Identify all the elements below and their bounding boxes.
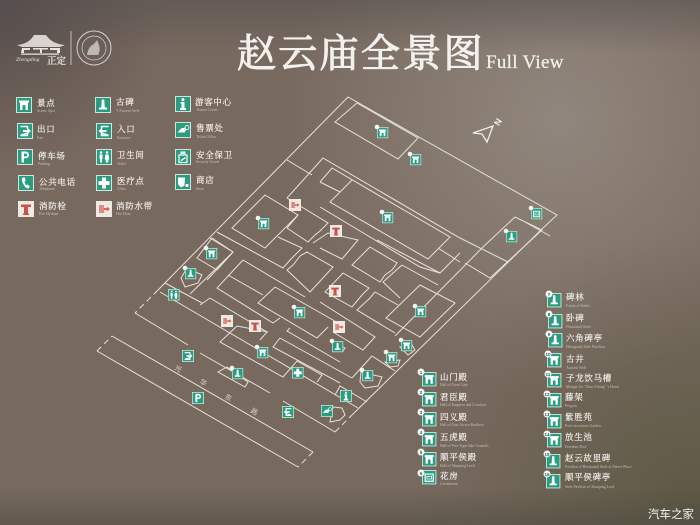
list item 15: 15 [544, 452, 550, 457]
marker: greenhouse [529, 206, 542, 219]
logo: Zhengding and temple seal: 正定 [47, 55, 67, 67]
list item 12 [544, 390, 583, 408]
legend item: ticket office [176, 122, 224, 139]
legend item: exit: Exit [37, 136, 44, 140]
marker: gate 13 [375, 125, 388, 138]
list item 5: Hall of Shunping Lord [440, 464, 475, 468]
list item 1: 1 [420, 370, 423, 375]
watermark: 汽车之家 [648, 507, 694, 521]
logo: Zhengding and temple seal [16, 31, 111, 67]
legend item: parking: 停车场 [38, 151, 66, 161]
legend item: entrance: Entrance [117, 136, 131, 140]
site plan walls [97, 97, 557, 467]
list item 13 [544, 410, 601, 428]
legend item: exit: 出口 [37, 124, 55, 134]
marker: stele 8 [330, 339, 343, 352]
legend item: parking: Parking [38, 162, 50, 166]
legend item: scenic spot: 景点 [37, 98, 55, 108]
list item 6 [418, 470, 458, 486]
road name: 东 [223, 392, 234, 403]
list item 3: Hall of Four Sworn Brothers [440, 423, 484, 427]
legend item: toilet: 卫生间 [117, 150, 145, 160]
legend item: store [176, 174, 214, 191]
legend item: ancient stele: 古碑 [116, 97, 134, 107]
legend item: ticket office: 售票处 [196, 123, 224, 133]
marker: stele 15 [183, 266, 196, 279]
list item 7: Forest of Steles [566, 304, 590, 308]
legend item: parking [18, 150, 66, 166]
legend item: scenic spot: Scenic Spot [37, 109, 56, 113]
legend item: clinic: Clinic [117, 187, 127, 191]
marker: toilet [168, 289, 179, 300]
marker: gate 11 [399, 338, 412, 351]
list item 6: 6 [420, 471, 423, 476]
logo: Zhengding and temple seal: Zhengding [16, 57, 40, 63]
list item 10: Ancient Well [566, 366, 586, 370]
list item 8: Horizontal Stele [566, 325, 591, 329]
legend item: telephone: 公共电话 [39, 177, 76, 187]
list item 5: 顺平侯殿 [440, 452, 477, 462]
road name: 华 [198, 377, 209, 388]
list item 16: Stele Pavilion of Shunping Lord [565, 485, 614, 489]
legend item: ancient stele [96, 97, 140, 113]
south courts [160, 252, 395, 408]
list item 16: 顺平侯碑亭 [565, 472, 611, 482]
list item 12: 藤架 [565, 392, 583, 402]
list item 9 [546, 330, 605, 349]
list item 15 [544, 450, 632, 469]
legend item: fire hose: Fire Hose [116, 212, 131, 216]
list item 10: 古井 [566, 354, 584, 364]
marker: gate 14 [204, 246, 217, 259]
legend item: store: Store [196, 187, 204, 191]
road name: 光 [173, 363, 184, 374]
list item 13: 13 [544, 412, 550, 417]
list item 16: 16 [544, 472, 550, 477]
legend item: scenic spot [16, 98, 56, 113]
legend item: tourist center [176, 96, 232, 112]
list item 9: 9 [548, 332, 551, 337]
list item 2: 君臣殿 [440, 392, 468, 402]
list item 11: 子龙饮马槽 [566, 373, 612, 383]
list item 13: 紫胜苑 [565, 412, 593, 422]
list item 6: Greenhouse [440, 482, 458, 486]
legend item: telephone: Telephone [39, 187, 55, 191]
list item 15: Pavilion of Horizontal Stele at Native Place [565, 465, 632, 469]
list item 11: Manger for "Zhao Zilong" 's Horse [566, 385, 620, 389]
marker: fire hose north [289, 199, 301, 211]
list item 3: 四义殿 [440, 412, 468, 422]
compass north arrow: N [492, 117, 504, 127]
legend item: clinic [96, 176, 145, 191]
list item 10: 10 [545, 352, 551, 357]
list item 8 [546, 310, 591, 329]
marker: stele 9 [230, 366, 243, 379]
main long hall enclosure [287, 158, 550, 336]
legend item: security guard: 安全保卫 [196, 150, 233, 160]
legend item: entrance: 入口 [117, 124, 135, 134]
list item 8: 卧碑 [566, 313, 584, 323]
rear hall [335, 103, 418, 159]
title: Full View: Full View [486, 52, 564, 73]
halls between west and centre [207, 232, 340, 338]
legend item: toilet [96, 150, 145, 166]
marker: hose center [333, 321, 345, 333]
list item 1 [418, 368, 468, 387]
list item 9: 六角碑亭 [566, 333, 603, 343]
marker: gate 5 [380, 210, 393, 223]
list item 7 [546, 290, 590, 308]
legend item: fire hydrant: 消防栓 [39, 201, 67, 211]
list item 7: 7 [548, 292, 551, 297]
marker: hydrant west [249, 320, 261, 332]
legend item: exit [18, 124, 55, 140]
marker: ticket office [321, 405, 333, 417]
legend item: entrance [96, 124, 135, 140]
road name: 路 [249, 406, 260, 417]
list item 16 [544, 470, 614, 489]
list item 2: Hall of Emperor and Courtiers [440, 403, 487, 407]
marker: exit [182, 350, 194, 362]
marker: gate west hall [256, 216, 269, 229]
list item 5 [418, 448, 477, 468]
list item 6: 花房 [440, 471, 458, 481]
list item 14 [544, 430, 593, 449]
legend item: security guard: Security Guard [196, 160, 219, 164]
marker: hose west [221, 315, 233, 327]
list item 15: 赵云故里碑 [565, 453, 611, 463]
list item 10 [544, 350, 586, 370]
legend item: fire hose: 消防水带 [116, 201, 153, 211]
legend item: fire hydrant: Fire Hydrant [39, 212, 59, 216]
legend item: store: 商店 [196, 175, 214, 185]
marker: gate east hall [413, 304, 426, 317]
west hall [232, 195, 298, 248]
list item 14: 放生池 [565, 432, 593, 442]
legend item: toilet: Toilet [117, 162, 127, 166]
list item 14: Freedom Pool [565, 445, 586, 449]
legend: facilities [16, 96, 233, 217]
list item 7: 碑林 [566, 292, 584, 302]
numbered list: halls 1-6 [418, 368, 489, 486]
list item 1: 山门殿 [440, 372, 468, 382]
marker: tourist center [340, 390, 352, 402]
legend item: ancient stele: T Ancient Stele [116, 109, 140, 113]
list item 5: 5 [420, 450, 423, 455]
list item 4: 4 [420, 430, 423, 435]
legend item: fire hose [96, 201, 153, 217]
list item 2: 2 [420, 390, 423, 395]
marker: gate 10 [384, 350, 397, 363]
legend item: clinic: 医疗点 [117, 176, 145, 186]
list item 4: 五虎殿 [440, 432, 468, 442]
marker: gate 12 [408, 152, 421, 165]
marker: hydrant center [329, 285, 341, 297]
marker: gate center [292, 305, 305, 318]
outer boundary [135, 97, 557, 432]
legend item: ticket office: Ticket Office [196, 135, 216, 139]
list item 11 [544, 370, 620, 389]
list item 1: Hall of Front Gate [440, 383, 468, 387]
marker: stele 10 [360, 368, 373, 381]
wall stub [287, 160, 312, 175]
marker: gate 3 [255, 345, 268, 358]
list item 2 [418, 388, 487, 407]
legend item: tourist center: 游客中心 [195, 97, 232, 107]
legend item: telephone [18, 176, 76, 191]
legend item: security guard [176, 150, 233, 164]
list item 11: 11 [546, 372, 551, 377]
marker: stele 7 [504, 229, 517, 242]
legend item: fire hydrant [18, 201, 67, 217]
marker: hydrant north [330, 225, 342, 237]
list item 3: 3 [420, 410, 423, 415]
marker: clinic [292, 367, 303, 378]
east hall [386, 285, 455, 337]
list item 9: Hexagonal Stele Pavilion [566, 345, 605, 349]
numbered list: sites 7-16 [544, 290, 632, 489]
list item 8: 8 [548, 312, 551, 317]
feature outlines around numbered spots [181, 238, 415, 422]
list item 13: Ever-victorious Garden [565, 424, 601, 428]
compass north arrow [473, 117, 504, 142]
list item 12: Pergola [565, 404, 577, 408]
legend item: tourist center: Tourist Center [196, 108, 219, 112]
list item 3 [418, 408, 484, 427]
centre halls [320, 247, 438, 350]
list item 14: 14 [544, 432, 550, 437]
road name [173, 363, 260, 417]
list item 12: 12 [544, 392, 550, 397]
list item 4: Hall of Five Tiger-like Generals [440, 444, 489, 448]
title: 赵云庙全景图 [237, 33, 485, 76]
list item 4 [418, 428, 489, 448]
map markers [168, 125, 542, 418]
marker: entrance [282, 406, 294, 418]
road strip [97, 336, 313, 467]
marker: parking [192, 392, 204, 404]
